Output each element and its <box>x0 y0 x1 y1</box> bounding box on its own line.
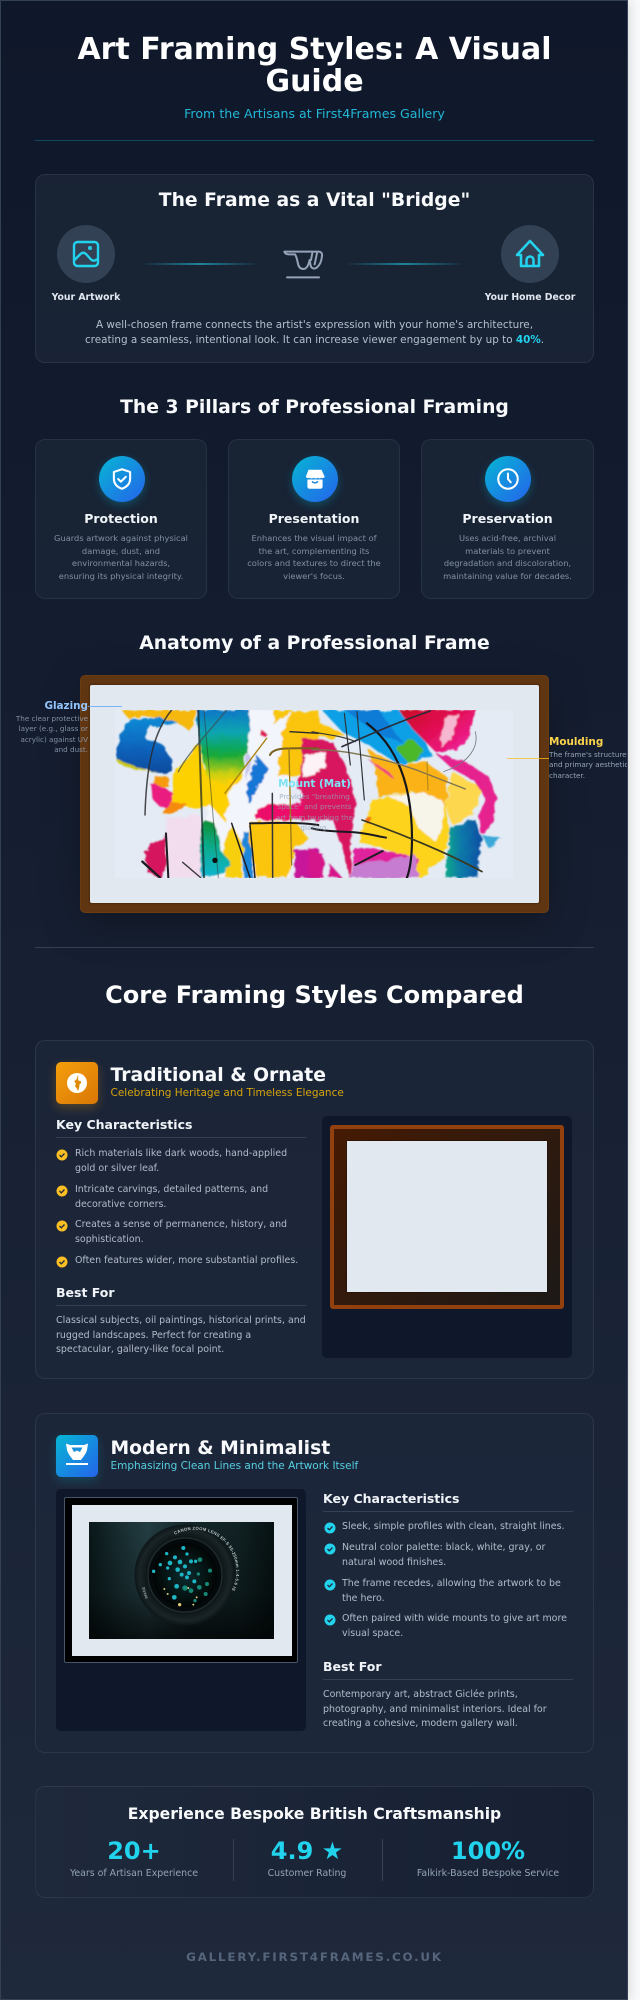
subtitle: modern: Emphasizing Clean Lines and the Artwork Itself <box>110 1460 358 1472</box>
panel: protection: damage, dust, and <box>82 546 160 556</box>
heading: bridge: The Frame as a Vital "Bridge" <box>159 190 470 211</box>
label: moulding: character. <box>549 771 585 780</box>
list: modern characteristics: the hero. <box>342 1593 385 1604</box>
title: Art Framing Styles: A Visual <box>77 32 552 67</box>
list: modern characteristics: natural wood finishes. <box>342 1557 446 1568</box>
title: traditional: Traditional & Ornate <box>110 1065 326 1086</box>
panel: protection <box>35 439 207 599</box>
modern frame <box>64 1497 298 1663</box>
stat: bespoke: 100% <box>451 1837 525 1865</box>
list: traditional characteristics: gold or silver leaf. <box>75 1163 159 1174</box>
label: glazing: acrylic) against UV <box>20 735 88 744</box>
label: your artwork: Your Artwork <box>52 292 120 303</box>
mat <box>346 1141 546 1292</box>
panel: bridge <box>35 174 594 363</box>
panel: craftsmanship stats <box>35 1786 594 1898</box>
panel: presentation: Presentation <box>269 511 359 526</box>
icon: store <box>292 456 338 502</box>
panel: protection: ensuring its physical integrity. <box>59 571 183 581</box>
list: modern characteristics: The frame recedes, allowing the artwork to be <box>342 1578 561 1589</box>
list: traditional characteristics: sophistication. <box>75 1234 144 1245</box>
title: Guide <box>265 64 364 99</box>
panel: presentation: viewer's focus. <box>283 571 345 581</box>
label: glazing: Glazing <box>44 700 88 712</box>
heading: core styles: Core Framing Styles Compared <box>105 981 524 1009</box>
panel: preservation: Preservation <box>462 511 553 526</box>
label: mount: glazing. <box>300 823 329 832</box>
stat: bespoke <box>417 1837 559 1879</box>
panel: modern visual <box>56 1489 306 1731</box>
stat: rating: Customer Rating <box>268 1868 346 1879</box>
list: modern characteristics: visual space. <box>342 1628 403 1639</box>
panel: preservation: maintaining value for decades. <box>443 571 572 581</box>
ornate frame <box>330 1125 564 1309</box>
icon: frame bridge <box>283 250 323 278</box>
heading: best for: Best For <box>56 1285 115 1300</box>
title: modern: Modern & Minimalist <box>110 1438 330 1459</box>
label: mount: space" and prevents <box>277 802 352 811</box>
label: glazing <box>16 700 122 754</box>
stat: rating: 4.9 ★ <box>271 1837 343 1865</box>
label: moulding: Moulding <box>549 736 603 748</box>
panel: preservation: degradation and discoloration, <box>444 558 571 568</box>
text: best for <box>323 1689 547 1729</box>
label: glazing: and dust. <box>54 745 88 754</box>
heading: best for: Best For <box>323 1659 382 1674</box>
list: traditional characteristics: Creates a sense of permanence, history, and <box>75 1219 287 1230</box>
panel: protection: environmental hazards, <box>72 558 170 568</box>
panel: protection: Protection <box>84 511 158 526</box>
icon: minimal <box>56 1435 98 1477</box>
bridge text: A well-chosen frame connects the artist's expression with your home's architecture, <box>96 319 533 331</box>
list: modern characteristics: Often paired with wide mounts to give art more <box>342 1613 567 1624</box>
label: mount: art from touching the <box>276 813 353 822</box>
text: best for: Contemporary art, abstract Giclée prints, <box>323 1689 518 1700</box>
text: best for: spectacular, gallery-like focal point. <box>56 1344 224 1355</box>
icon: shield <box>98 456 144 502</box>
label: glazing: The clear protective <box>16 714 88 723</box>
artwork: lens photo <box>89 1522 274 1639</box>
panel: modern <box>35 1413 594 1753</box>
panel: preservation: Uses acid-free, archival <box>459 533 556 543</box>
stat: bespoke: Falkirk-Based Bespoke Service <box>417 1868 559 1879</box>
label: your home decor: Your Home Decor <box>485 292 575 303</box>
bridge text: creating a seamless, intentional look. It can increase viewer engagement by up to 40%. <box>85 334 544 346</box>
footer: GALLERY.FIRST4FRAMES.CO.UK <box>186 1950 443 1964</box>
bridge text <box>85 319 544 346</box>
icon: clock <box>484 456 530 502</box>
diagram: anatomy frame <box>80 675 549 913</box>
list: modern characteristics: Sleek, simple profiles with clean, straight lines. <box>342 1521 564 1532</box>
list: modern characteristics <box>324 1521 567 1639</box>
icon: home <box>501 225 559 283</box>
mat <box>72 1505 292 1656</box>
panel: protection: Guards artwork against physical <box>54 533 188 543</box>
subtitle: From the Artisans at First4Frames Gallery <box>184 106 445 121</box>
heading: pillars: The 3 Pillars of Professional Framing <box>120 397 509 418</box>
artwork: abstract painting <box>115 710 502 878</box>
icon: ornate <box>56 1062 98 1104</box>
heading: craftsmanship: Experience Bespoke British Craftsmanship <box>128 1805 501 1823</box>
label: moulding <box>507 736 628 780</box>
label: mount: Mount (Mat) <box>278 778 351 790</box>
label: glazing: layer (e.g., glass or <box>19 724 88 733</box>
stat: experience <box>70 1837 198 1879</box>
list: traditional characteristics: Often features wider, more substantial profiles. <box>75 1255 298 1266</box>
heading: key characteristics: Key Characteristics <box>56 1117 192 1132</box>
subtitle: traditional: Celebrating Heritage and Timeless Elegance <box>110 1087 344 1099</box>
stat: experience: 20+ <box>107 1837 161 1865</box>
panel: preservation: materials to prevent <box>465 546 550 556</box>
panel: presentation: colors and textures to direct the <box>247 558 381 568</box>
artwork: lens photo: CANON ZOOM LENS EF-S 55-250mm 1:4-5.6 IS <box>174 1526 240 1591</box>
list: traditional characteristics: Rich materials like dark woods, hand-applied <box>75 1148 287 1159</box>
panel: traditional <box>35 1040 594 1379</box>
list: traditional characteristics: Intricate carvings, detailed patterns, and <box>75 1184 268 1195</box>
text: best for: photography, and minimalist interiors. Ideal for <box>323 1704 547 1715</box>
stat: experience: Years of Artisan Experience <box>70 1868 198 1879</box>
panel: presentation <box>228 439 400 599</box>
label: moulding: and primary aesthetic <box>549 760 628 769</box>
icon: artwork <box>57 225 115 283</box>
stat: rating <box>268 1837 346 1879</box>
panel: presentation: Enhances the visual impact of <box>252 533 376 543</box>
text: best for: creating a cohesive, modern gallery wall. <box>323 1718 518 1729</box>
text: best for <box>56 1315 306 1355</box>
panel: presentation: the art, complementing its <box>259 546 369 556</box>
text: best for: Classical subjects, oil paintings, historical prints, and <box>56 1315 306 1326</box>
label: moulding: The frame's structure <box>549 750 627 759</box>
list: traditional characteristics <box>56 1148 298 1268</box>
title <box>77 32 552 99</box>
label: mount: Provides "breathing <box>279 792 350 801</box>
panel: ornate visual <box>322 1116 572 1358</box>
artwork: lens photo: IMAGE <box>142 1587 148 1599</box>
mount <box>90 685 539 903</box>
label: mount <box>276 778 353 832</box>
panel: preservation <box>421 439 594 599</box>
list: modern characteristics: Neutral color palette: black, white, gray, or <box>342 1542 545 1553</box>
list: traditional characteristics: decorative corners. <box>75 1199 166 1210</box>
text: best for: rugged landscapes. Perfect for creating a <box>56 1330 251 1341</box>
heading: key characteristics: Key Characteristics <box>323 1491 459 1506</box>
heading: anatomy: Anatomy of a Professional Frame <box>139 633 490 654</box>
